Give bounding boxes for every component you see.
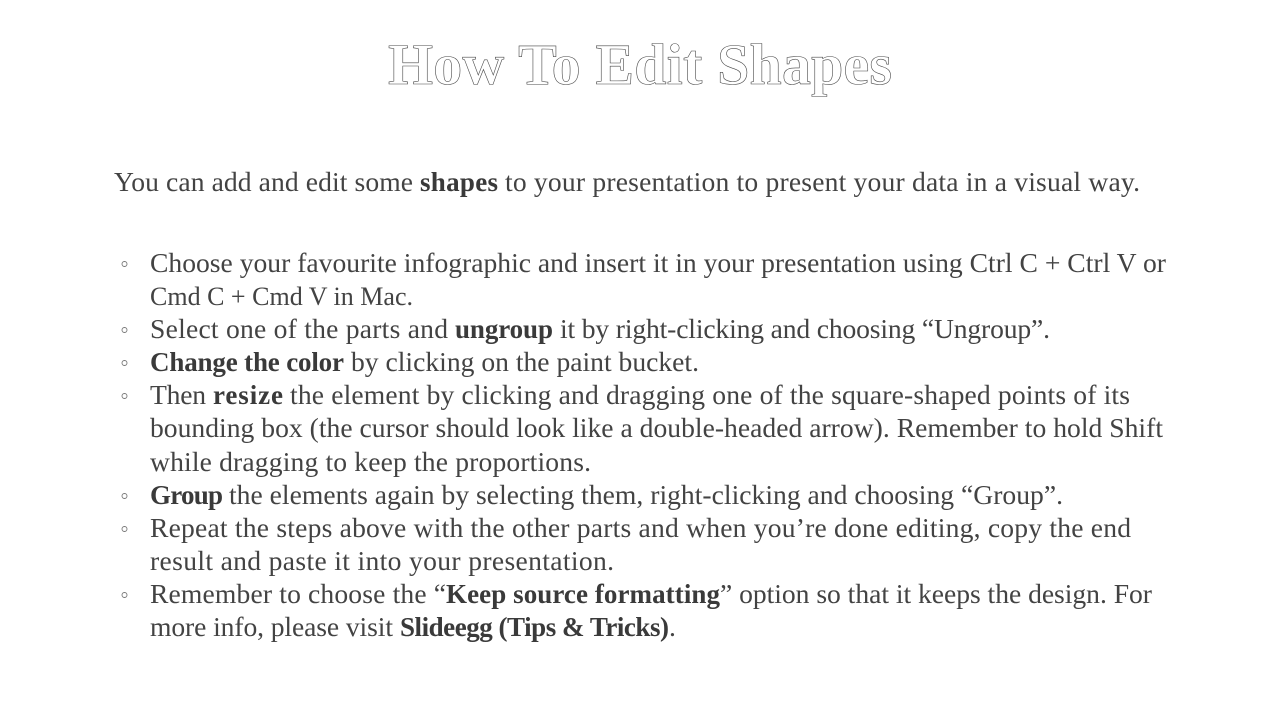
bullet 5: the elements again by selecting them, right-clicking and choosing “Group”. — [229, 479, 1063, 510]
bullet 7: Keep source formatting — [446, 579, 720, 609]
bullet 4: while dragging to keep the proportions. — [150, 446, 591, 477]
intro text: You can add and edit some — [114, 166, 413, 197]
title: How To Edit Shapes — [388, 32, 892, 97]
bullet 7: more info, please visit — [150, 611, 393, 642]
bullet 6 — [122, 512, 1131, 576]
bullet 3 — [122, 346, 699, 377]
bullet 4: the element by clicking and dragging one of the square-shaped points of its — [290, 379, 1130, 410]
bullet 4: resize — [213, 380, 283, 410]
bullet 7: . — [669, 611, 676, 642]
bullet 4: bounding box (the cursor should look like a double-headed arrow). Remember to hold Shift — [150, 412, 1163, 443]
bullet list — [122, 247, 1166, 642]
bullet 5: Group — [150, 480, 223, 510]
bullet 3: Change the color — [150, 347, 344, 377]
bullet 3: by clicking on the paint bucket. — [351, 346, 699, 377]
intro text: shapes — [420, 167, 498, 197]
bullet 7: Slideegg (Tips & Tricks) — [400, 612, 669, 642]
bullet 6: result and paste it into your presentation. — [150, 545, 614, 576]
bullet 2: Select one of the parts and — [150, 313, 448, 344]
bullet 4: Then — [150, 379, 206, 410]
bullet 1: Cmd C + Cmd V in Mac. — [150, 282, 413, 311]
bullet 2 — [122, 313, 1050, 344]
bullet 2: ungroup — [455, 314, 553, 344]
bullet 4 — [122, 379, 1163, 477]
bullet 1 — [122, 247, 1166, 311]
bullet 2: it by right-clicking and choosing “Ungroup”. — [560, 313, 1050, 344]
bullet 7: Remember to choose the “ — [150, 578, 446, 609]
intro text — [114, 166, 1140, 197]
bullet 1: Choose your favourite infographic and insert it in your presentation using Ctrl C + Ctrl V or — [150, 247, 1166, 278]
bullet 7: ” option so that it keeps the design. For — [720, 578, 1152, 609]
bullet 6: Repeat the steps above with the other parts and when you’re done editing, copy the end — [150, 512, 1131, 543]
bullet 7 — [122, 578, 1152, 642]
intro text: to your presentation to present your data in a visual way. — [505, 166, 1140, 197]
